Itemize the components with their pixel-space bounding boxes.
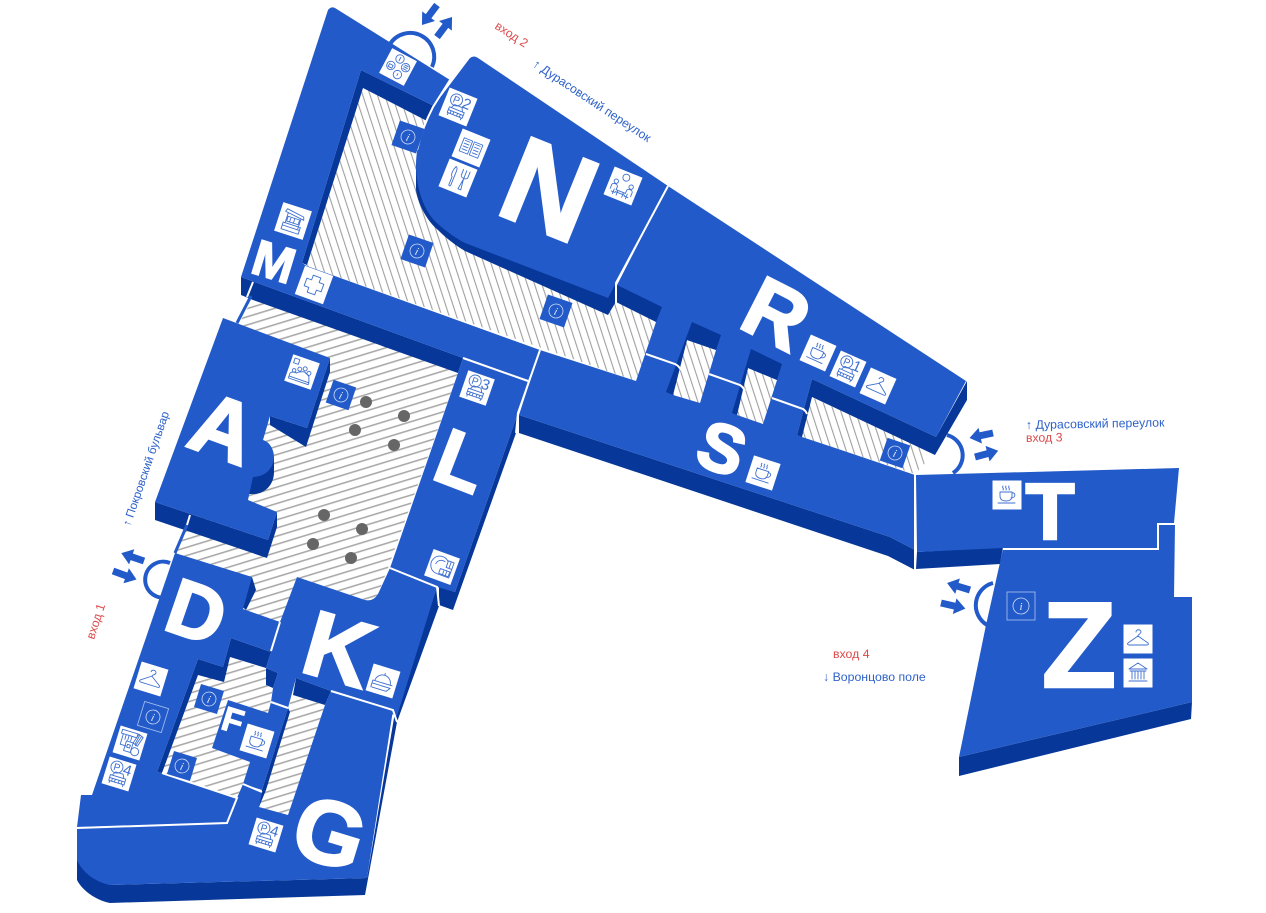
info 4: i [337,390,344,402]
wing letters: T [1026,467,1075,556]
icon: parking 2: P [451,95,462,107]
wings R and S [519,186,966,550]
wing F [212,700,288,790]
entrance arrows [110,0,1000,616]
street and entrance labels: ↑ Дурасовский переулок [530,57,654,145]
icon: cup T [992,480,1022,510]
wing letters: M [246,229,302,295]
icon: dining [424,549,460,585]
icon: cup F [240,724,274,758]
info outlined D: i [149,712,156,724]
wing N [416,56,668,298]
icon: services [379,48,417,86]
street and entrance labels: вход 4 [833,647,870,661]
info 2 [400,234,434,268]
icon: meeting [603,166,643,206]
wing Z [959,524,1192,757]
info 6 [167,751,197,781]
icon: conference group [284,354,320,390]
info 7 [880,438,910,468]
icon: tray [366,664,400,698]
wing K [266,568,437,716]
icon: cup S [745,455,781,491]
icon: cup R [800,335,836,371]
icon: parking 4 D [102,757,136,791]
icon: book [451,128,491,168]
wing letters: G [281,776,378,892]
wing D [77,553,280,827]
icon: parking 1: P [841,356,852,369]
wing G [77,691,393,885]
info 3 [539,294,573,328]
street and entrance labels: вход 3 [1026,430,1063,445]
wing letters: A [178,373,269,485]
icon: parking 2 [438,87,478,127]
wing L [390,358,528,592]
wing letters: R [728,258,825,370]
info outlined D [137,701,169,733]
icon: medical cross [295,266,333,304]
info 3: i [552,306,559,318]
info 5 [194,684,224,714]
wing letters [156,110,1116,892]
icon: parking 4 G [249,818,283,852]
street and entrance labels: ↑ Дурасовский переулок [1026,416,1165,432]
icon: parking 3: P [470,376,480,388]
wing letters: N [483,110,616,269]
wing A [155,318,330,540]
icon: parking 3 [459,370,495,406]
street and entrance labels: вход 2 [492,19,531,51]
wing letters: S [687,405,756,492]
info 6: i [178,761,185,773]
icon: parking 4 D: P [112,762,122,774]
icon: parking 3: 3 [479,376,492,394]
icons [102,48,1152,852]
street and entrance labels: ↓ Воронцово поле [823,670,926,684]
hatched courtyards [162,88,656,815]
wing T [916,468,1179,552]
icon: parking 4 G: 4 [268,822,281,841]
icon: register [274,202,312,240]
icon: museum [1124,658,1152,688]
column dots [307,396,410,564]
info outlined Z [1007,592,1035,620]
info markers [137,120,1035,781]
blue edge strips beside the courtyard [175,296,251,553]
white divider lines [77,80,1175,828]
info 2: i [413,246,420,258]
info 5: i [205,694,212,706]
icon: parking 1 [830,351,866,387]
info 4 [326,380,356,410]
icon: hanger D [134,662,168,696]
info 7: i [891,448,898,460]
info outlined Z: i [1019,601,1023,613]
icon: parking 2: 2 [459,95,474,114]
notches between R and S [616,285,967,474]
wing letters: Z [1042,577,1116,713]
icon: parking 4 D: 4 [121,761,134,780]
wing letters: L [424,411,500,511]
icon: hanger Z [1124,624,1152,654]
icon: parking 1: 1 [849,357,864,376]
wing letters: F [217,700,248,742]
street and entrance labels [84,19,1165,684]
icon: hanger R [860,368,896,404]
street and entrance labels: вход 1 [84,602,108,641]
icon: multi services [113,726,147,760]
wing letters: K [292,592,384,708]
icon: restaurant [438,158,478,198]
wing letters: D [156,561,238,663]
entrance arcs [145,33,993,625]
wing M [241,7,540,381]
street and entrance labels: ↑ Покровский бульвар [120,409,172,528]
info 1 [391,120,425,154]
info 1: i [404,132,411,144]
icon: parking 4 G: P [259,823,269,835]
